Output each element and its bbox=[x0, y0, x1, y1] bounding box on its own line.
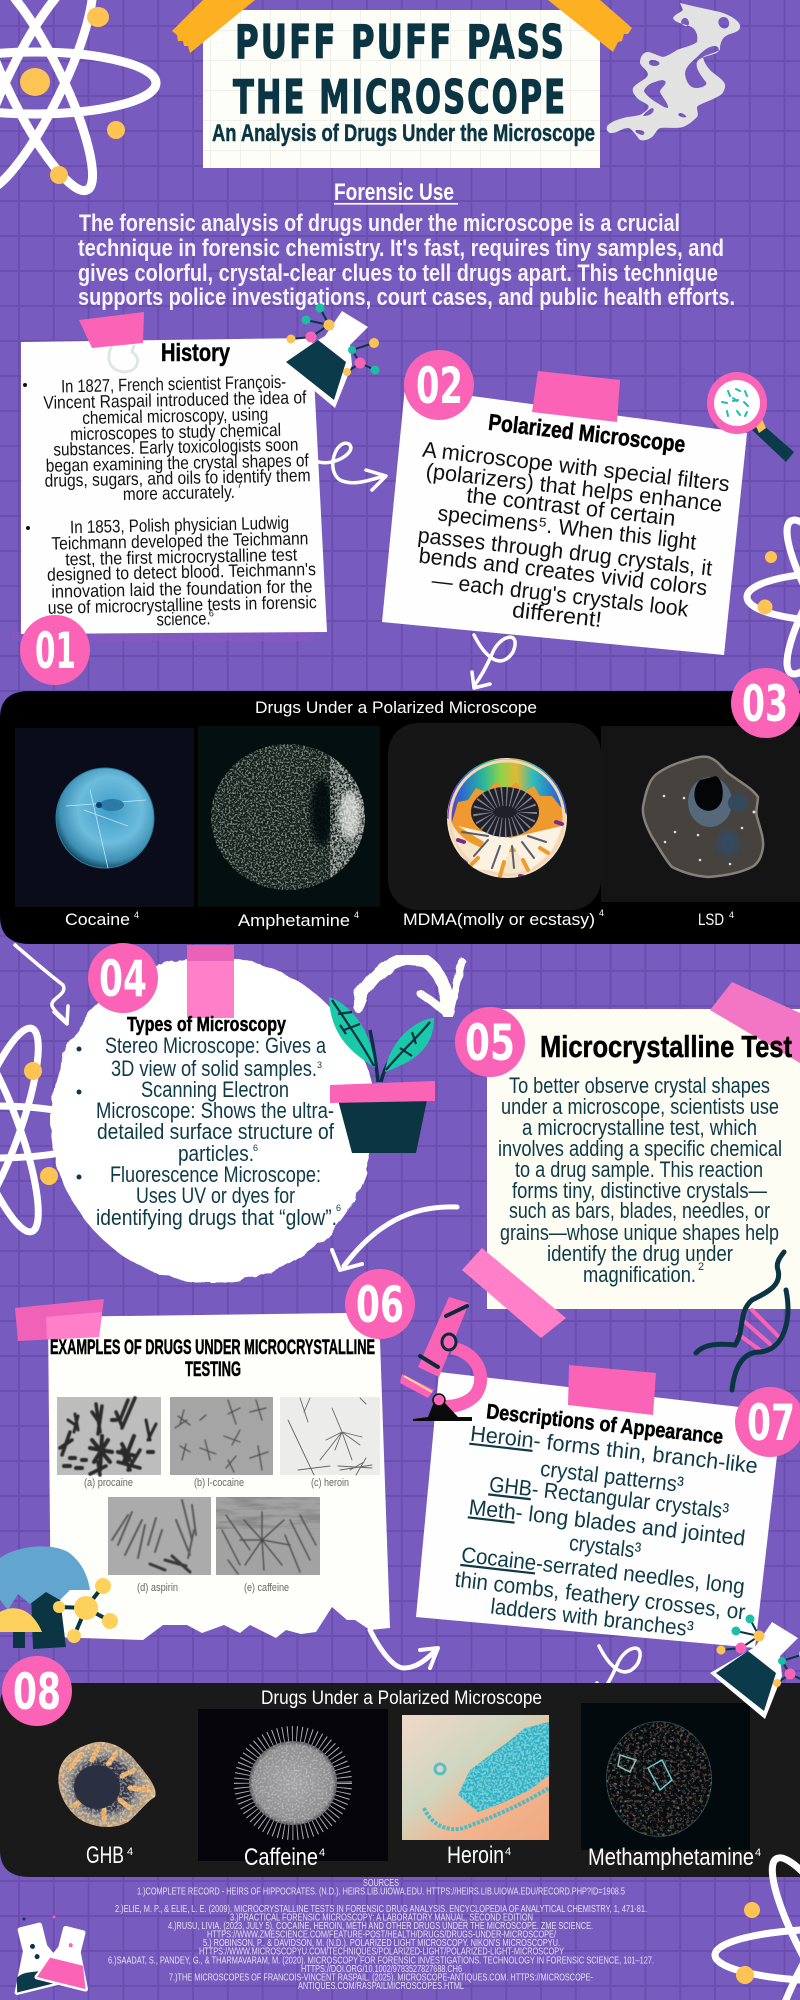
drug labels: 4 bbox=[354, 910, 359, 920]
text: sources: HTTPS://DOI.ORG/10.1002/9783527827688.CH6 bbox=[301, 1964, 462, 1975]
text: sources: 4.)RUSU, LIVIA. (2023, JULY 5). COCAINE, HEROIN, METH AND OTHER DRUGS UNDER THE MICROSCOPE. ZME SCIENCE. bbox=[168, 1921, 593, 1932]
types text: Microscope: Shows the ultra- bbox=[96, 1098, 334, 1123]
icon: flask bottom right bbox=[710, 1614, 800, 1719]
tape bbox=[568, 1365, 656, 1415]
text: sources: ANTIQUES.COM/RASPAILMICROSCOPES.HTML bbox=[298, 1981, 464, 1992]
image: procaine bbox=[57, 1397, 161, 1475]
history text: more accurately. bbox=[123, 482, 235, 504]
descriptions text: thin combs, feathery crosses, or bbox=[454, 1567, 747, 1624]
panel: polarized microscope bbox=[382, 371, 747, 655]
subtitle: An Analysis of Drugs Under the Microscope bbox=[212, 120, 595, 147]
microcrystalline text: magnification. bbox=[583, 1262, 696, 1287]
heading: descriptions: Descriptions of Appearance bbox=[485, 1400, 724, 1449]
image: amphetamine bbox=[198, 726, 380, 907]
polarized text: A microscope with special filters bbox=[421, 437, 731, 496]
history text bbox=[42, 371, 317, 632]
drug labels: GHB bbox=[86, 1842, 124, 1869]
drug labels: Cocaine bbox=[65, 910, 130, 929]
badge 03 bbox=[731, 668, 800, 738]
types text bbox=[96, 1033, 341, 1230]
image captions: (a) procaine bbox=[84, 1477, 133, 1489]
arrow: polarized to panel 03 bbox=[472, 635, 515, 688]
icon: atom bottom right bbox=[715, 1846, 800, 2000]
drug labels: 4 bbox=[319, 1847, 325, 1859]
drug labels: 4 bbox=[505, 1846, 511, 1858]
image captions: (d) aspirin bbox=[137, 1582, 178, 1594]
heading: Forensic Use: Forensic Use bbox=[334, 179, 454, 206]
types text: identifying drugs that “glow”. bbox=[96, 1205, 337, 1230]
polarized text: the contrast of certain bbox=[465, 482, 677, 531]
text: forensic intro: The forensic analysis of drugs under the microscope is a crucial bbox=[79, 210, 680, 237]
heading: polarized: Polarized Microscope bbox=[487, 409, 687, 457]
arrow: descriptions to panel 08 bbox=[597, 1646, 640, 1699]
history text: 6 bbox=[209, 608, 214, 618]
polarized text: different! bbox=[511, 597, 603, 632]
panel: title card bbox=[172, 0, 632, 168]
badge 02: 02 bbox=[416, 357, 463, 415]
image: LSD bbox=[601, 726, 800, 902]
text: sources: HTTPS://WWW.ZMESCIENCE.COM/FEATURE-POST/HEALTH/DRUGS/DRUGS-UNDER-MICROSCOPE/ bbox=[207, 1930, 556, 1940]
badge 04: 04 bbox=[99, 950, 147, 1008]
heading: Drugs Under a Polarized Microscope bbox=[255, 698, 537, 717]
text: sources: 1.)COMPLETE RECORD - HEIRS OF HIPPOCRATES. (N.D.). HEIRS.LIB.UIOWA.EDU. HTTPS://HEIRS.LIB.UIOWA.EDU/RECORD.PHP?ID=1908.5 bbox=[137, 1886, 625, 1898]
polarized text: — each drug's crystals look bbox=[430, 567, 691, 622]
badge 05 bbox=[455, 1007, 525, 1077]
history text: use of microcrystalline tests in forensic bbox=[48, 592, 317, 618]
history text: innovation laid the foundation for the bbox=[51, 576, 313, 602]
heading: examples: TESTING bbox=[185, 1358, 241, 1381]
history text: In 1827, French scientist François- bbox=[61, 372, 286, 396]
icon: atom top left bbox=[0, 0, 156, 202]
history text: In 1853, Polish physician Ludwig bbox=[70, 513, 289, 537]
history text: test, the first microcrystalline test bbox=[65, 545, 297, 569]
history text: microscopes to study chemical bbox=[70, 420, 281, 444]
polarized text: passes through drug crystals, it bbox=[417, 522, 714, 581]
icon: DNA bbox=[696, 1252, 788, 1390]
icon: flask with molecules bbox=[280, 304, 380, 408]
badge 02 bbox=[404, 350, 474, 420]
history text: substances. Early toxicologists soon bbox=[53, 434, 299, 460]
icon: smoke bbox=[607, 3, 740, 140]
arrow: card 06 down right bbox=[370, 1630, 438, 1668]
types text: 6 bbox=[253, 1143, 258, 1153]
types text: 6 bbox=[336, 1203, 341, 1213]
panel: drugs under polarized microscope 2 bbox=[0, 1683, 800, 1877]
drug labels: Caffeine bbox=[244, 1844, 318, 1871]
image captions: (b) l-cocaine bbox=[194, 1477, 244, 1489]
panel: types of microscopy bbox=[51, 945, 375, 1283]
image: GHB bbox=[58, 1742, 156, 1827]
heading: examples: EXAMPLES OF DRUGS UNDER MICROCRYSTALLINE bbox=[50, 1336, 375, 1359]
image: caffeine bbox=[198, 1709, 388, 1861]
heading: Drugs Under a Polarized Microscope bbox=[261, 1688, 542, 1709]
descriptions text: GHB- Rectangular crystals³ bbox=[488, 1471, 730, 1524]
tape and paperclip bbox=[79, 312, 144, 372]
types text: 3 bbox=[317, 1060, 322, 1070]
tape bbox=[187, 945, 234, 1018]
microcrystalline text: 2 bbox=[698, 1261, 704, 1273]
types text: particles. bbox=[178, 1141, 254, 1166]
title: THE MICROSCOPE bbox=[233, 70, 567, 124]
text: sources: 7.)THE MICROSCOPES OF FRANCOIS-VINCENT RASPAIL. (2025). MICROSCOPE-ANTIQUES.COM. HTTPS://MICROSCOPE- bbox=[169, 1972, 593, 1984]
title bbox=[233, 15, 567, 124]
descriptions text: Meth- long blades and jointed bbox=[468, 1494, 747, 1551]
drug labels: 4 bbox=[599, 908, 604, 918]
types text: Stereo Microscope: Gives a bbox=[105, 1033, 327, 1058]
icon: atom left bbox=[0, 1020, 105, 1240]
tape: bottom left of card 05 bbox=[462, 1248, 566, 1338]
tape bbox=[532, 371, 620, 422]
drug labels: 4 bbox=[134, 910, 139, 920]
drug labels: Heroin bbox=[447, 1842, 504, 1869]
heading: history: History bbox=[161, 339, 230, 367]
badge 06 bbox=[345, 1269, 415, 1339]
badge 01 bbox=[20, 615, 90, 685]
tape top right bbox=[710, 982, 800, 1063]
image captions: (e) caffeine bbox=[244, 1582, 289, 1594]
icon: magnifier bbox=[707, 372, 794, 462]
polarized text bbox=[417, 437, 731, 632]
descriptions text: crystals³ bbox=[568, 1530, 642, 1563]
badge 08 bbox=[2, 1656, 72, 1726]
drug labels: 4 bbox=[729, 910, 734, 920]
panel: history bbox=[12, 312, 327, 641]
badge 01: 01 bbox=[35, 622, 76, 680]
types text: 3D view of solid samples. bbox=[111, 1056, 317, 1081]
history text: 7 bbox=[237, 480, 242, 490]
panel: drugs under polarized microscope 1 bbox=[0, 691, 800, 944]
image: aspirin bbox=[108, 1497, 211, 1575]
drug labels: 4 bbox=[127, 1846, 133, 1858]
bullets bbox=[76, 1046, 82, 1180]
badge 04 bbox=[88, 943, 158, 1013]
text: forensic intro bbox=[78, 210, 735, 311]
badge 05: 05 bbox=[465, 1014, 515, 1072]
heading: examples bbox=[50, 1336, 375, 1381]
descriptions text: ladders with branches³ bbox=[489, 1594, 695, 1641]
image captions bbox=[84, 1477, 349, 1594]
arrow: to card 06 bbox=[332, 1207, 457, 1270]
heading: types: Types of Microscopy bbox=[127, 1014, 287, 1036]
types text: detailed surface structure of bbox=[97, 1119, 335, 1144]
history text: designed to detect blood. Teichmann's bbox=[47, 559, 316, 585]
image: l-cocaine bbox=[170, 1397, 273, 1475]
image: methamphetamine bbox=[581, 1703, 750, 1850]
descriptions text: Heroin- forms thin, branch-like bbox=[469, 1421, 759, 1478]
drug labels: Amphetamine bbox=[238, 911, 350, 930]
history text: Teichmann developed the Teichmann bbox=[51, 528, 309, 554]
descriptions text bbox=[454, 1421, 759, 1641]
polarized text: (polarizers) that helps enhance bbox=[425, 458, 724, 517]
microcrystalline text: identify the drug under bbox=[547, 1241, 733, 1266]
arrow: history to polarized bbox=[316, 443, 386, 490]
tape bbox=[15, 1299, 104, 1341]
text: sources bbox=[108, 1878, 654, 1992]
descriptions text: Cocaine-serrated needles, long bbox=[460, 1542, 746, 1599]
panel: descriptions of appearance bbox=[416, 1365, 782, 1648]
icon: potted plant bbox=[329, 997, 435, 1153]
text: sources: SOURCES bbox=[363, 1878, 399, 1889]
image captions: (c) heroin bbox=[311, 1477, 349, 1489]
badge 06: 06 bbox=[356, 1276, 404, 1334]
title: PUFF PUFF PASS bbox=[235, 15, 566, 69]
polarized text: specimens⁵. When this light bbox=[436, 500, 698, 555]
text: sources: 5.) ROBINSON, P., & DAVIDSON, M. (N.D.). POLARIZED LIGHT MICROSCOPY. NIKON'S MICROSCOPYU. bbox=[203, 1938, 560, 1949]
types text: Uses UV or dyes for bbox=[136, 1183, 295, 1208]
image: cocaine bbox=[15, 728, 194, 907]
history text: science. bbox=[156, 608, 211, 629]
image: heroin bbox=[280, 1397, 380, 1475]
image: heroin bbox=[402, 1715, 551, 1840]
drug labels: 4 bbox=[755, 1847, 761, 1859]
text: sources: HTTPS://WWW.MICROSCOPYU.COM/TECHNIQUES/POLARIZED-LIGHT/POLARIZED-LIGHT-MICROSCOPY bbox=[199, 1946, 564, 1958]
icon: atom right bbox=[747, 510, 800, 684]
drug labels: LSD bbox=[698, 910, 724, 929]
drug labels: Methamphetamine bbox=[588, 1844, 754, 1871]
arrow: brush curved arrow bbox=[358, 958, 462, 1014]
types text: Fluorescence Microscope: bbox=[110, 1162, 321, 1187]
icon: mushrooms and molecule bbox=[0, 1546, 118, 1649]
text: sources: 3.)PRACTICAL FORENSIC MICROSCOPY: A LABORATORY MANUAL, SECOND EDITION bbox=[230, 1912, 533, 1924]
descriptions text: crystal patterns³ bbox=[539, 1456, 685, 1497]
badge 08: 08 bbox=[13, 1663, 61, 1721]
types text: Scanning Electron bbox=[141, 1077, 289, 1102]
tape: title right bbox=[548, 0, 632, 52]
icon: two flasks bbox=[3, 1916, 99, 1992]
history text: began examining the crystal shapes of bbox=[46, 450, 310, 476]
tape: title left bbox=[172, 0, 255, 53]
microcrystalline text: a microcrystalline test, which bbox=[522, 1115, 757, 1140]
microcrystalline text bbox=[498, 1073, 782, 1287]
history text: chemical microscopy, using bbox=[82, 404, 268, 428]
image: caffeine bbox=[216, 1497, 320, 1575]
icon: microscope bbox=[400, 1297, 481, 1421]
arrow: wiggle down bbox=[15, 945, 68, 1024]
history text: drugs, sugars, and oils to identify them bbox=[44, 465, 311, 491]
bullets bbox=[23, 383, 30, 530]
panel: microcrystalline test bbox=[487, 982, 800, 1309]
drug labels bbox=[65, 908, 734, 930]
history text: Vincent Raspail introduced the idea of bbox=[43, 387, 307, 413]
drug labels bbox=[86, 1842, 761, 1871]
drug labels: MDMA(molly or ecstasy) bbox=[403, 910, 595, 929]
badge 07 bbox=[735, 1387, 800, 1457]
image: MDMA bbox=[388, 723, 601, 910]
polarized text: bends and creates vivid colors bbox=[418, 543, 709, 600]
panel: microcrystalline examples bbox=[15, 1299, 390, 1640]
